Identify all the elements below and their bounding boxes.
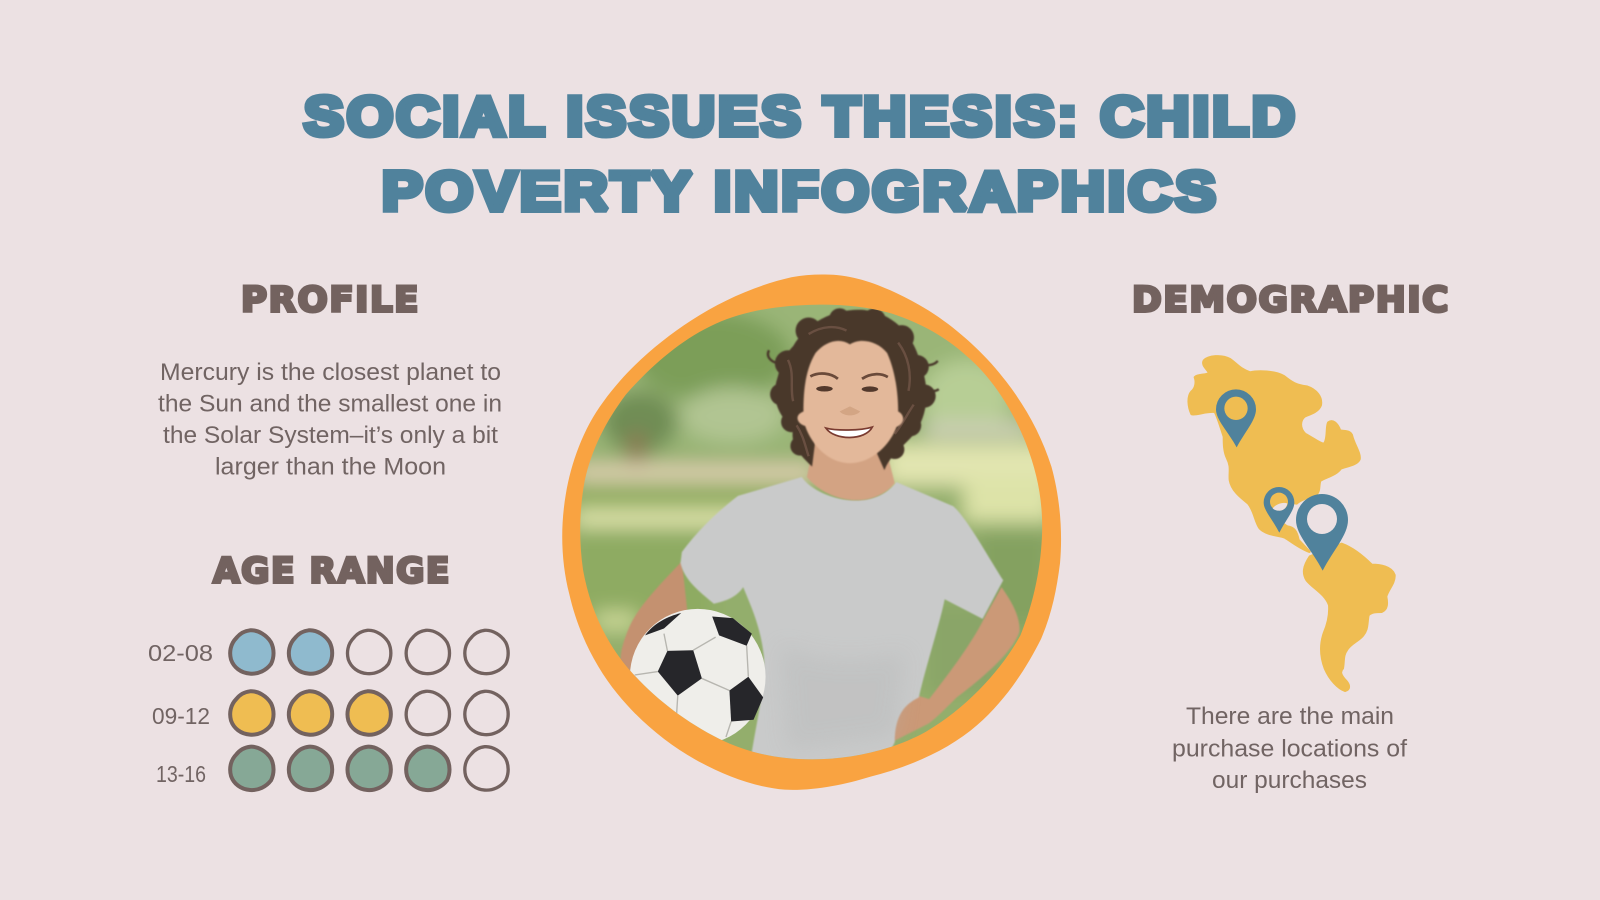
profile description text: the Solar System–it’s only a bit: [163, 422, 498, 449]
left arm: [620, 562, 688, 670]
right arm and hand: [890, 587, 1019, 741]
title: POVERTY INFOGRAPHICS: [382, 160, 1219, 222]
neck: [807, 443, 895, 500]
eyes and brows: [810, 373, 888, 392]
panel: age range: [148, 552, 508, 790]
photo: boy with soccer ball in orange blob frame: [561, 274, 1063, 790]
photo scene: [580, 304, 1042, 760]
demographic description text: purchase locations of: [1172, 736, 1407, 762]
soccer ball: [630, 609, 766, 745]
row: ages 13-16: 13-16: [156, 761, 206, 787]
curly hair: [768, 308, 939, 470]
heading: age range: AGE RANGE: [213, 552, 451, 592]
pin: central: [1264, 487, 1294, 533]
face: [798, 341, 903, 463]
row: ages 13-16: [156, 747, 508, 790]
row: ages 09-12: 09-12: [152, 703, 210, 729]
smile: [826, 427, 872, 437]
demographic description text: our purchases: [1212, 767, 1367, 794]
nose: [840, 406, 860, 415]
demographic description text: There are the main: [1186, 703, 1394, 730]
pin: north: [1216, 389, 1256, 447]
map: north america: [1189, 356, 1360, 552]
map: south america: [1304, 544, 1394, 691]
orange blob frame: [562, 274, 1061, 790]
profile description text: larger than the Moon: [215, 454, 446, 480]
panel: profile: [158, 280, 502, 480]
row: ages 02-08: 02-08: [148, 640, 213, 666]
map of the Americas with location pins: [1189, 356, 1394, 691]
title: SOCIAL ISSUES THESIS: CHILD: [304, 85, 1298, 147]
heading: profile: PROFILE: [241, 280, 420, 320]
gray t-shirt: [681, 477, 1003, 763]
pin: south: [1296, 494, 1348, 571]
title: [304, 85, 1298, 222]
heading: demographic: DEMOGRAPHIC: [1132, 280, 1450, 320]
row: ages 02-08: [148, 630, 508, 674]
blurred park background: [580, 304, 1042, 760]
profile description text: the Sun and the smallest one in: [158, 390, 502, 418]
profile description text: [158, 359, 502, 480]
profile description text: Mercury is the closest planet to: [160, 359, 501, 386]
panel: demographic: [1132, 280, 1450, 794]
demographic description text: [1172, 703, 1407, 794]
row: ages 09-12: [152, 691, 508, 735]
